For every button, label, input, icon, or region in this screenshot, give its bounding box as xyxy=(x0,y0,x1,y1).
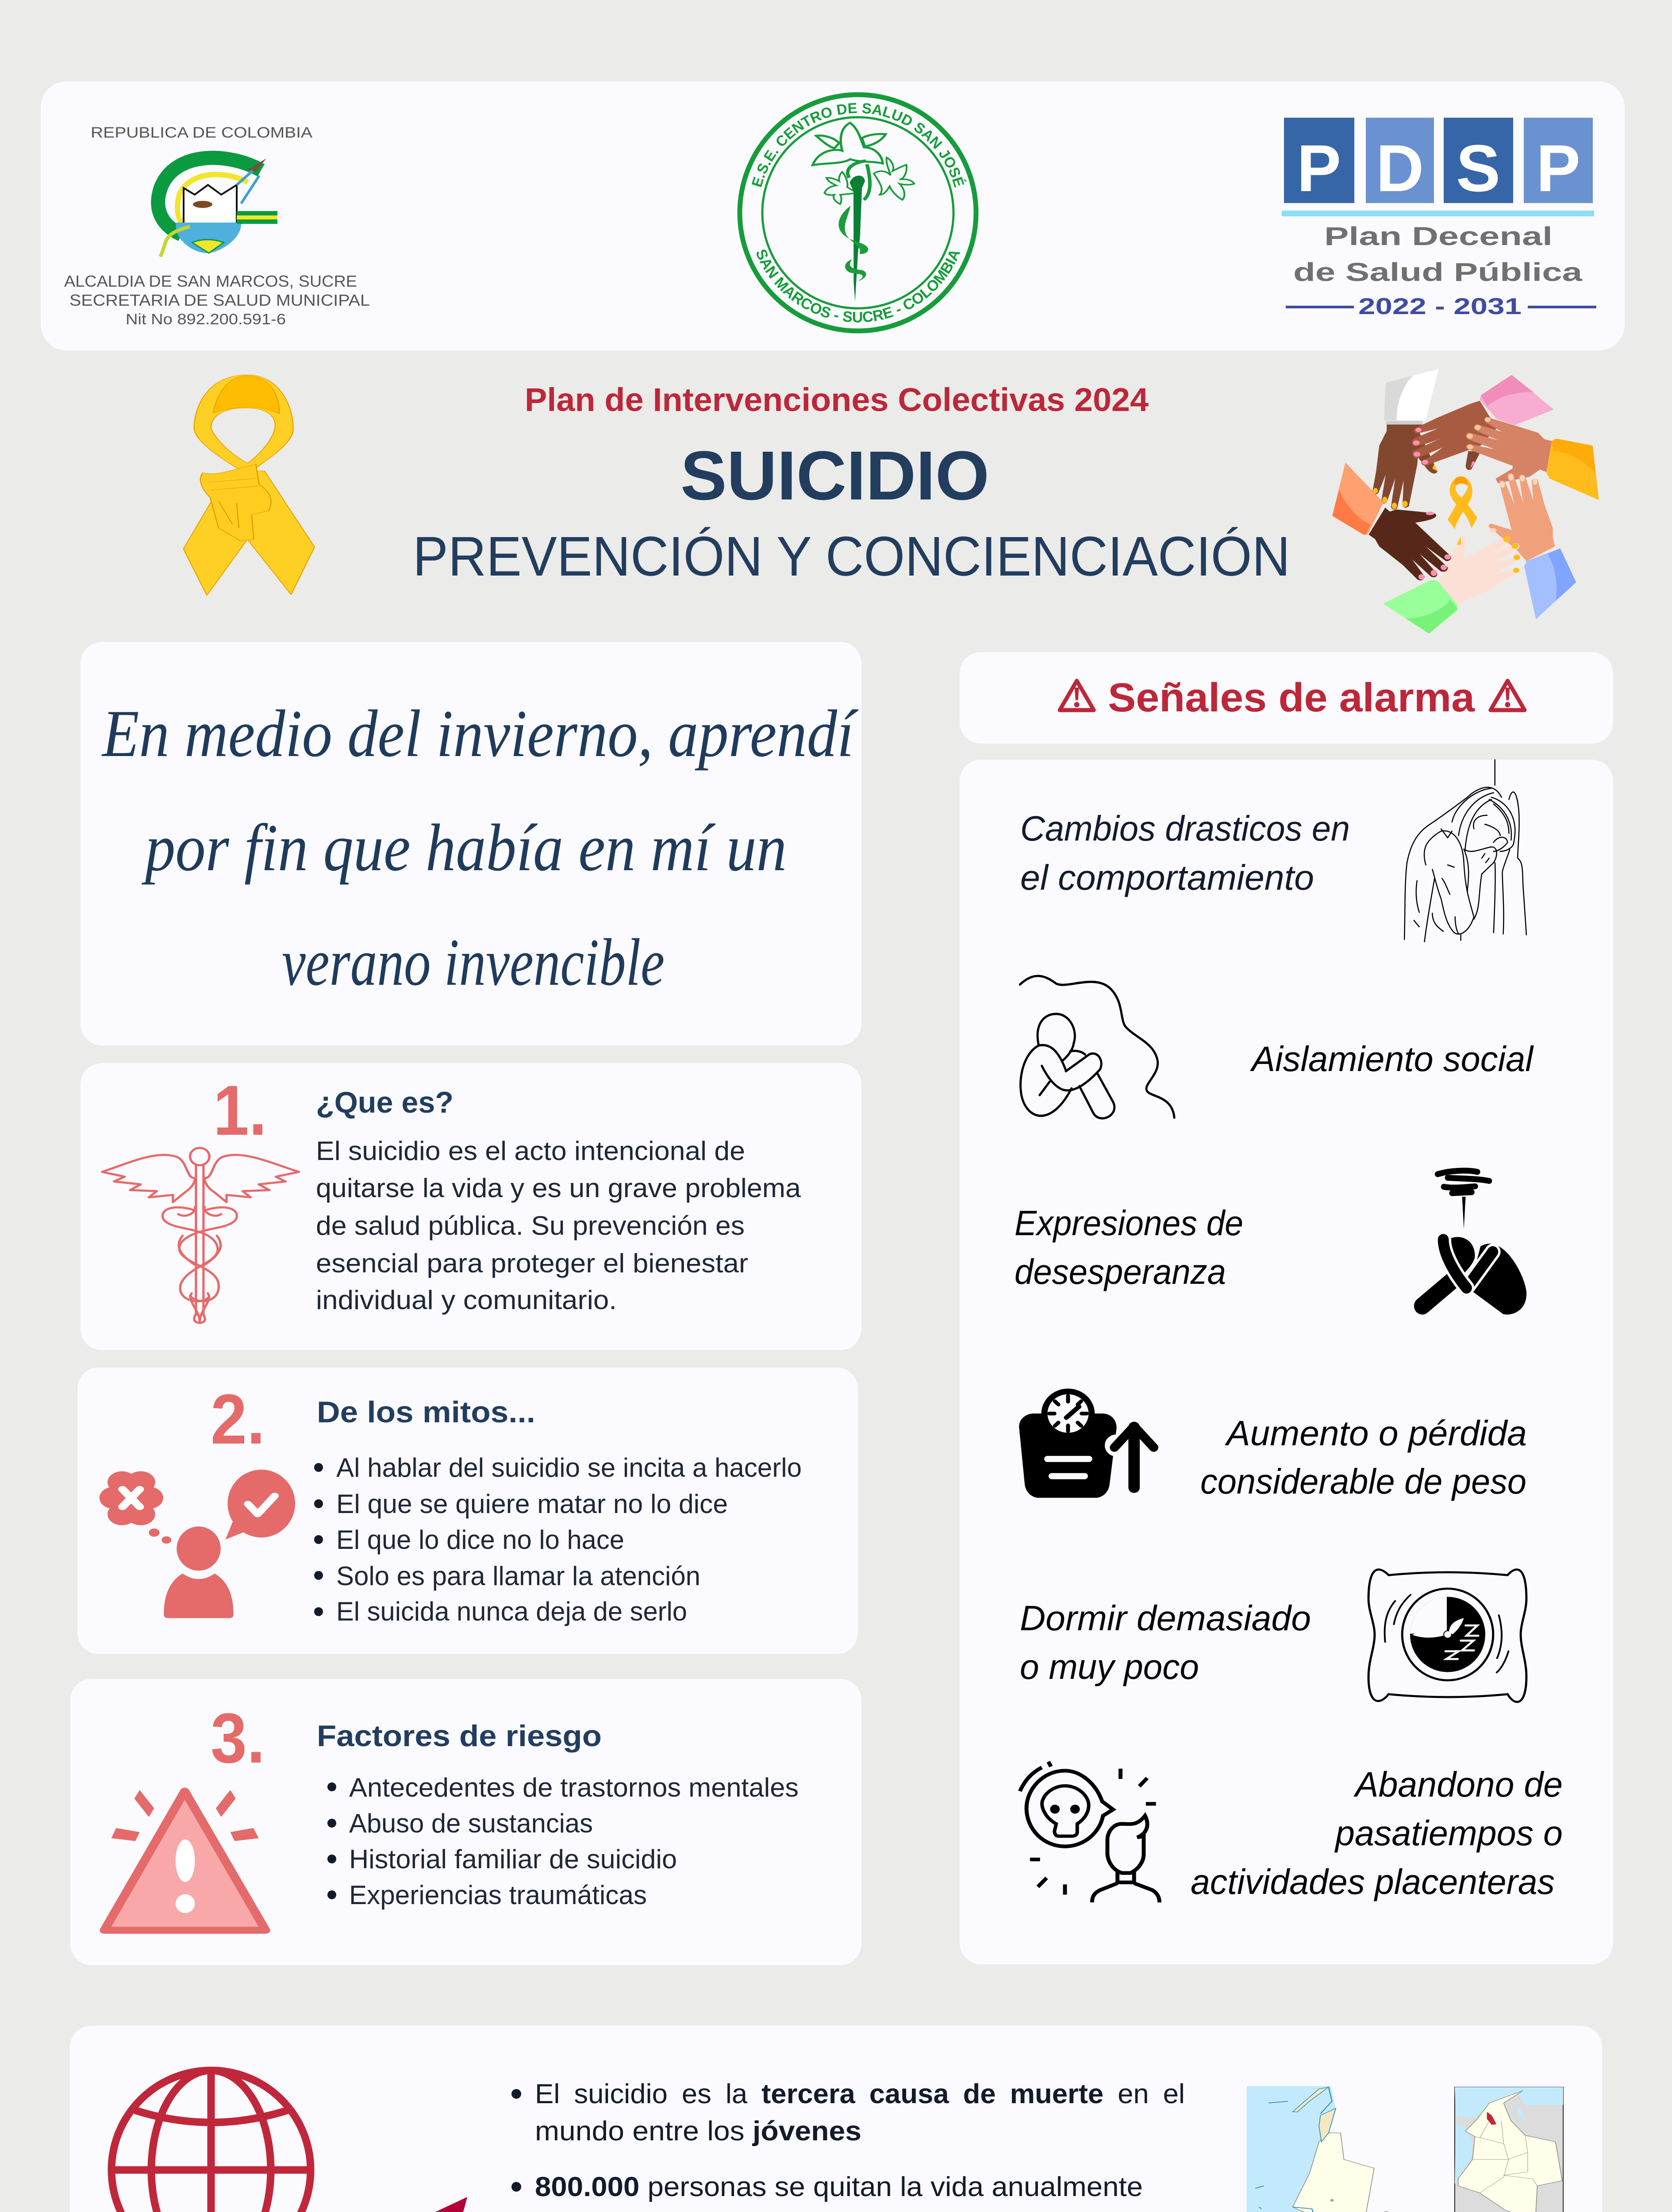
logo: ESE Centro de Salud San José xyxy=(740,95,976,331)
number 2: 2. xyxy=(211,1379,265,1459)
quote text: En medio del invierno, aprendí xyxy=(101,696,859,771)
heading: myths: De los mitos... xyxy=(317,1395,535,1429)
logo: PDSP Plan Decenal de Salud Pública: de Salud Pública xyxy=(1293,258,1583,287)
text: behaviour changes: Cambios drasticos en xyxy=(1020,809,1350,848)
text: sleep: Dormir demasiado xyxy=(1020,1598,1311,1638)
logo: alcaldia de San Marcos: SECRETARIA DE SALUD MUNICIPAL xyxy=(69,291,370,309)
logo: PDSP Plan Decenal de Salud Pública: 2022 - 2031 xyxy=(1358,294,1522,319)
panel: warning signs xyxy=(960,760,1613,1964)
list: risk factors: Historial familiar de suicidio xyxy=(349,1844,677,1874)
panel: what it is xyxy=(81,1063,861,1350)
text: behaviour changes xyxy=(1020,809,1350,897)
body text: El suicidio es el acto intencional de xyxy=(316,1136,745,1166)
logo: PDSP Plan Decenal de Salud Pública: S xyxy=(1456,131,1500,205)
list: myths: Al hablar del suicidio se incita a hacerlo xyxy=(336,1453,802,1482)
logo: ESE Centro de Salud San José: SAN MARCOS - SUCRE - COLOMBIA xyxy=(752,246,964,326)
icon: isolated figure xyxy=(1020,976,1174,1118)
logo: alcaldia de San Marcos: ALCALDIA DE SAN MARCOS, SUCRE xyxy=(64,272,357,290)
icon: weight scale with arrow xyxy=(1019,1389,1154,1498)
text: loss of interest: Abandono de xyxy=(1353,1765,1563,1804)
text: sleep: o muy poco xyxy=(1020,1647,1199,1686)
heading: programme: Plan de Intervenciones Colectivas 2024 xyxy=(525,381,1149,418)
list: risk factors: Experiencias traumáticas xyxy=(349,1880,647,1910)
number 3: 3. xyxy=(211,1698,265,1778)
panel: statistics xyxy=(70,2026,1602,2212)
text: sleep xyxy=(1020,1598,1311,1686)
quote text xyxy=(101,696,859,999)
logo: PDSP Plan Decenal de Salud Pública: P xyxy=(1536,131,1580,205)
list: risk factors: Abuso de sustancias xyxy=(349,1809,593,1838)
icon: person with thoughts xyxy=(100,1470,295,1618)
logo: PDSP Plan Decenal de Salud Pública: Plan Decenal xyxy=(1324,222,1553,251)
list: statistics: 800.000 personas se quitan la vida anualmente xyxy=(535,2172,1143,2202)
panel: myths xyxy=(77,1367,858,1654)
body text xyxy=(316,1136,801,1315)
list: statistics xyxy=(511,2079,1225,2212)
body text: esencial para proteger el bienestar xyxy=(316,1248,748,1278)
logo: PDSP Plan Decenal de Salud Pública: D xyxy=(1376,131,1424,205)
list: myths: El que se quiere matar no lo dice xyxy=(336,1489,728,1519)
panel: logo header xyxy=(41,81,1625,350)
icon: caduceus xyxy=(102,1148,299,1323)
list: risk factors: Antecedentes de trastornos mentales xyxy=(349,1773,799,1802)
list: myths: El que lo dice no lo hace xyxy=(336,1525,624,1555)
icon: globe xyxy=(111,2070,311,2212)
icon: person thinking of skull xyxy=(1020,1762,1160,1902)
icon: hands circle with ribbon xyxy=(1332,369,1599,634)
list: myths: El suicida nunca deja de serlo xyxy=(336,1597,687,1626)
text: hopelessness: desesperanza xyxy=(1015,1252,1226,1291)
text: isolation: Aislamiento social xyxy=(1250,1039,1534,1079)
icon: municipal crest xyxy=(158,158,277,257)
list: statistics: mundo entre los jóvenes xyxy=(535,2116,861,2147)
icon: sad person line drawing xyxy=(1404,760,1526,942)
text: weight change xyxy=(1200,1413,1527,1501)
quote text: verano invencible xyxy=(282,925,665,999)
number 1: 1. xyxy=(213,1071,267,1150)
icon: yellow awareness ribbon xyxy=(184,375,315,595)
list: myths: Solo es para llamar la atención xyxy=(336,1561,700,1591)
logo: alcaldia de San Marcos: REPUBLICA DE COLOMBIA xyxy=(91,124,312,141)
text: hopelessness xyxy=(1015,1203,1243,1291)
icon: alert left xyxy=(1060,681,1094,710)
heading: what is it: ¿Que es? xyxy=(316,1086,454,1119)
body text: quitarse la vida y es un grave problema xyxy=(316,1173,801,1203)
panel: risk factors xyxy=(70,1679,861,1965)
logo: PDSP Plan Decenal de Salud Pública xyxy=(1282,118,1596,319)
heading: risk factors: Factores de riesgo xyxy=(317,1719,602,1753)
map: Sucre department with San Marcos highlighted xyxy=(1246,2086,1564,2212)
text: hopelessness: Expresiones de xyxy=(1015,1203,1243,1243)
text: loss of interest: actividades placenteras xyxy=(1191,1862,1555,1901)
logo: alcaldia de San Marcos: Nit No 892.200.591-6 xyxy=(126,311,286,328)
text: loss of interest: pasatiempos o xyxy=(1334,1813,1563,1853)
icon: pillow with clock xyxy=(1368,1570,1526,1702)
icon: warning triangle xyxy=(104,1790,265,1930)
text: behaviour changes: el comportamiento xyxy=(1020,858,1314,897)
list: myths xyxy=(314,1453,802,1626)
quote text: por fin que había en mí un xyxy=(142,810,787,885)
logo: alcaldia de San Marcos xyxy=(64,124,370,328)
subtitle: PREVENCIÓN Y CONCIENCIACIÓN xyxy=(413,525,1290,588)
text: weight change: Aumento o pérdida xyxy=(1225,1413,1527,1453)
logo: PDSP Plan Decenal de Salud Pública: P xyxy=(1297,131,1341,205)
icon: alert right xyxy=(1491,681,1525,710)
panel: warning signs heading xyxy=(960,652,1613,744)
map: Colombia locator inset xyxy=(1455,2087,1563,2212)
list: statistics: El suicidio es la tercera causa de muerte en el xyxy=(535,2079,1185,2109)
heading: warning signs: Señales de alarma xyxy=(1108,675,1475,720)
text: loss of interest xyxy=(1191,1765,1563,1901)
chart: rising bars xyxy=(108,2197,467,2212)
panel: quote xyxy=(81,642,861,1045)
icon: staff with serpent and lilies xyxy=(813,123,915,301)
title: SUICIDIO xyxy=(680,437,989,515)
arrow: upward trend xyxy=(108,2197,467,2212)
body text: individual y comunitario. xyxy=(316,1285,617,1315)
list: risk factors xyxy=(327,1773,799,1910)
logo: ESE Centro de Salud San José: E.S.E. CENTRO DE SALUD SAN JOSÉ xyxy=(748,100,968,189)
icon: figure with storm cloud xyxy=(1422,1171,1526,1314)
text: weight change: considerable de peso xyxy=(1200,1462,1526,1501)
body text: de salud pública. Su prevención es xyxy=(316,1211,745,1240)
